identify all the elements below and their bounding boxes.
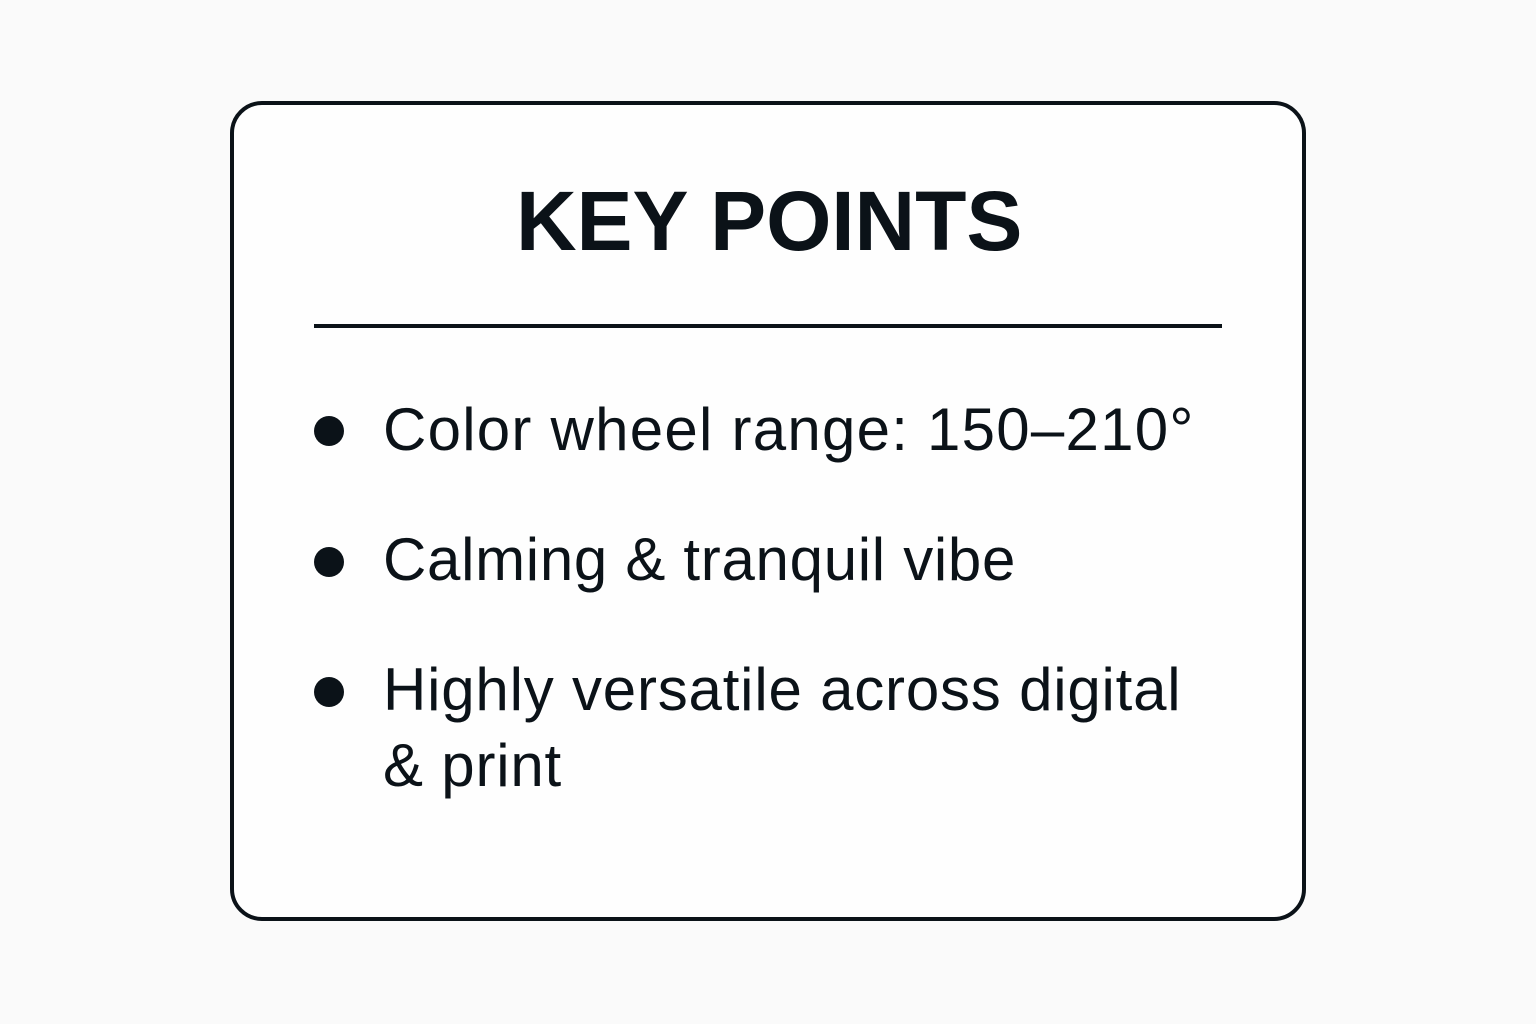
text: color wheel range: Color wheel range: 150–210°: [383, 396, 1195, 463]
bullet icon 1: [314, 416, 344, 446]
bullet icon 2: [314, 547, 344, 577]
title: KEY POINTS: [516, 174, 1022, 268]
text: versatile: & print: [383, 732, 562, 799]
text: calming vibe: Calming & tranquil vibe: [383, 526, 1016, 593]
panel: key points card: [230, 101, 1306, 921]
text: versatile: Highly versatile across digital: [383, 656, 1181, 723]
divider: [314, 324, 1222, 328]
text: versatile: [383, 656, 1181, 799]
bullet icon 3: [314, 677, 344, 707]
